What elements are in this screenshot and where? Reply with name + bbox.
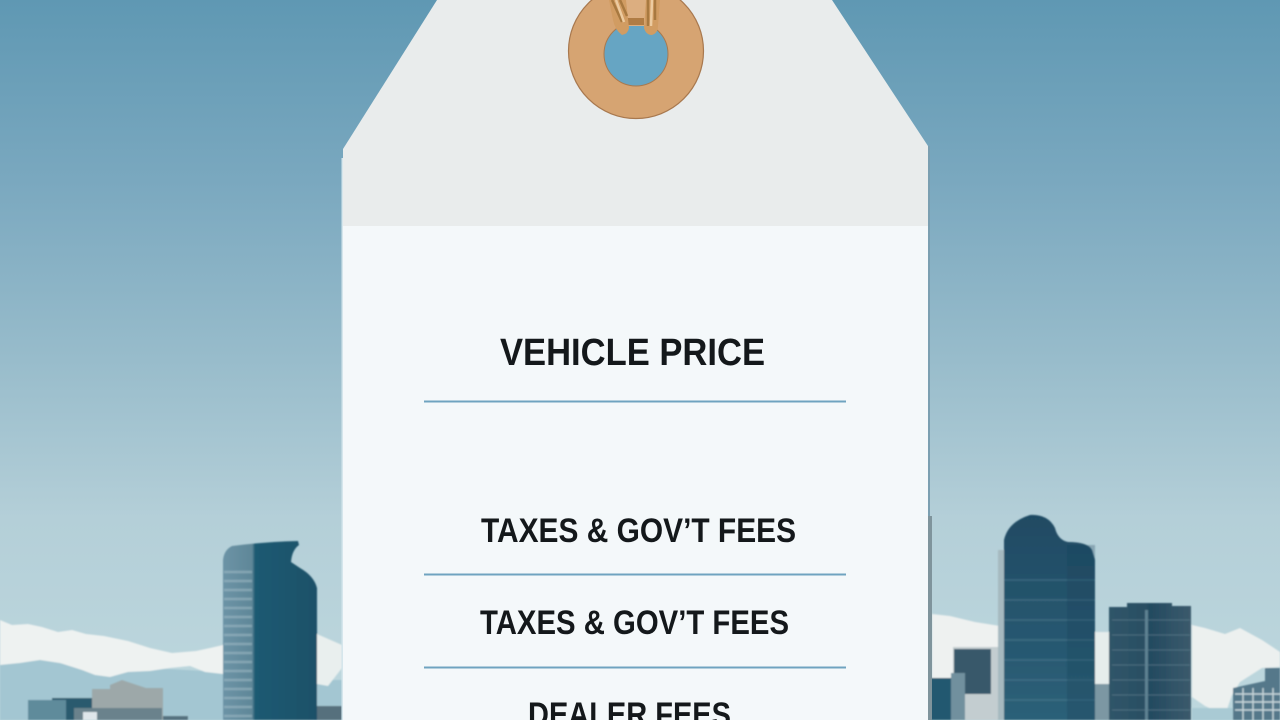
low buildings right [930, 647, 1000, 720]
tag top section [343, 0, 928, 227]
string [609, 0, 660, 35]
mountains right [932, 614, 1280, 720]
tower left [223, 541, 317, 720]
building far right [1233, 668, 1280, 720]
row: taxes and gov't fees: TAXES & GOV’T FEES [481, 512, 796, 550]
tag body [343, 226, 928, 720]
grommet ring [568, 0, 704, 118]
tag left highlight [342, 158, 343, 720]
low building left [28, 680, 188, 720]
mountains left [0, 620, 345, 720]
row: taxes and gov't fees repeated: TAXES & GOV’T FEES [480, 604, 789, 642]
tower right main [998, 515, 1095, 720]
price tag [342, 0, 932, 720]
grommet with string [568, 0, 704, 118]
right skyline with mountains [930, 515, 1280, 720]
tag edge shadow [928, 146, 932, 720]
grommet hole [604, 22, 668, 86]
tower right second [1109, 603, 1191, 720]
heading: vehicle price: VEHICLE PRICE [500, 332, 765, 374]
left skyline with mountains [0, 541, 345, 720]
